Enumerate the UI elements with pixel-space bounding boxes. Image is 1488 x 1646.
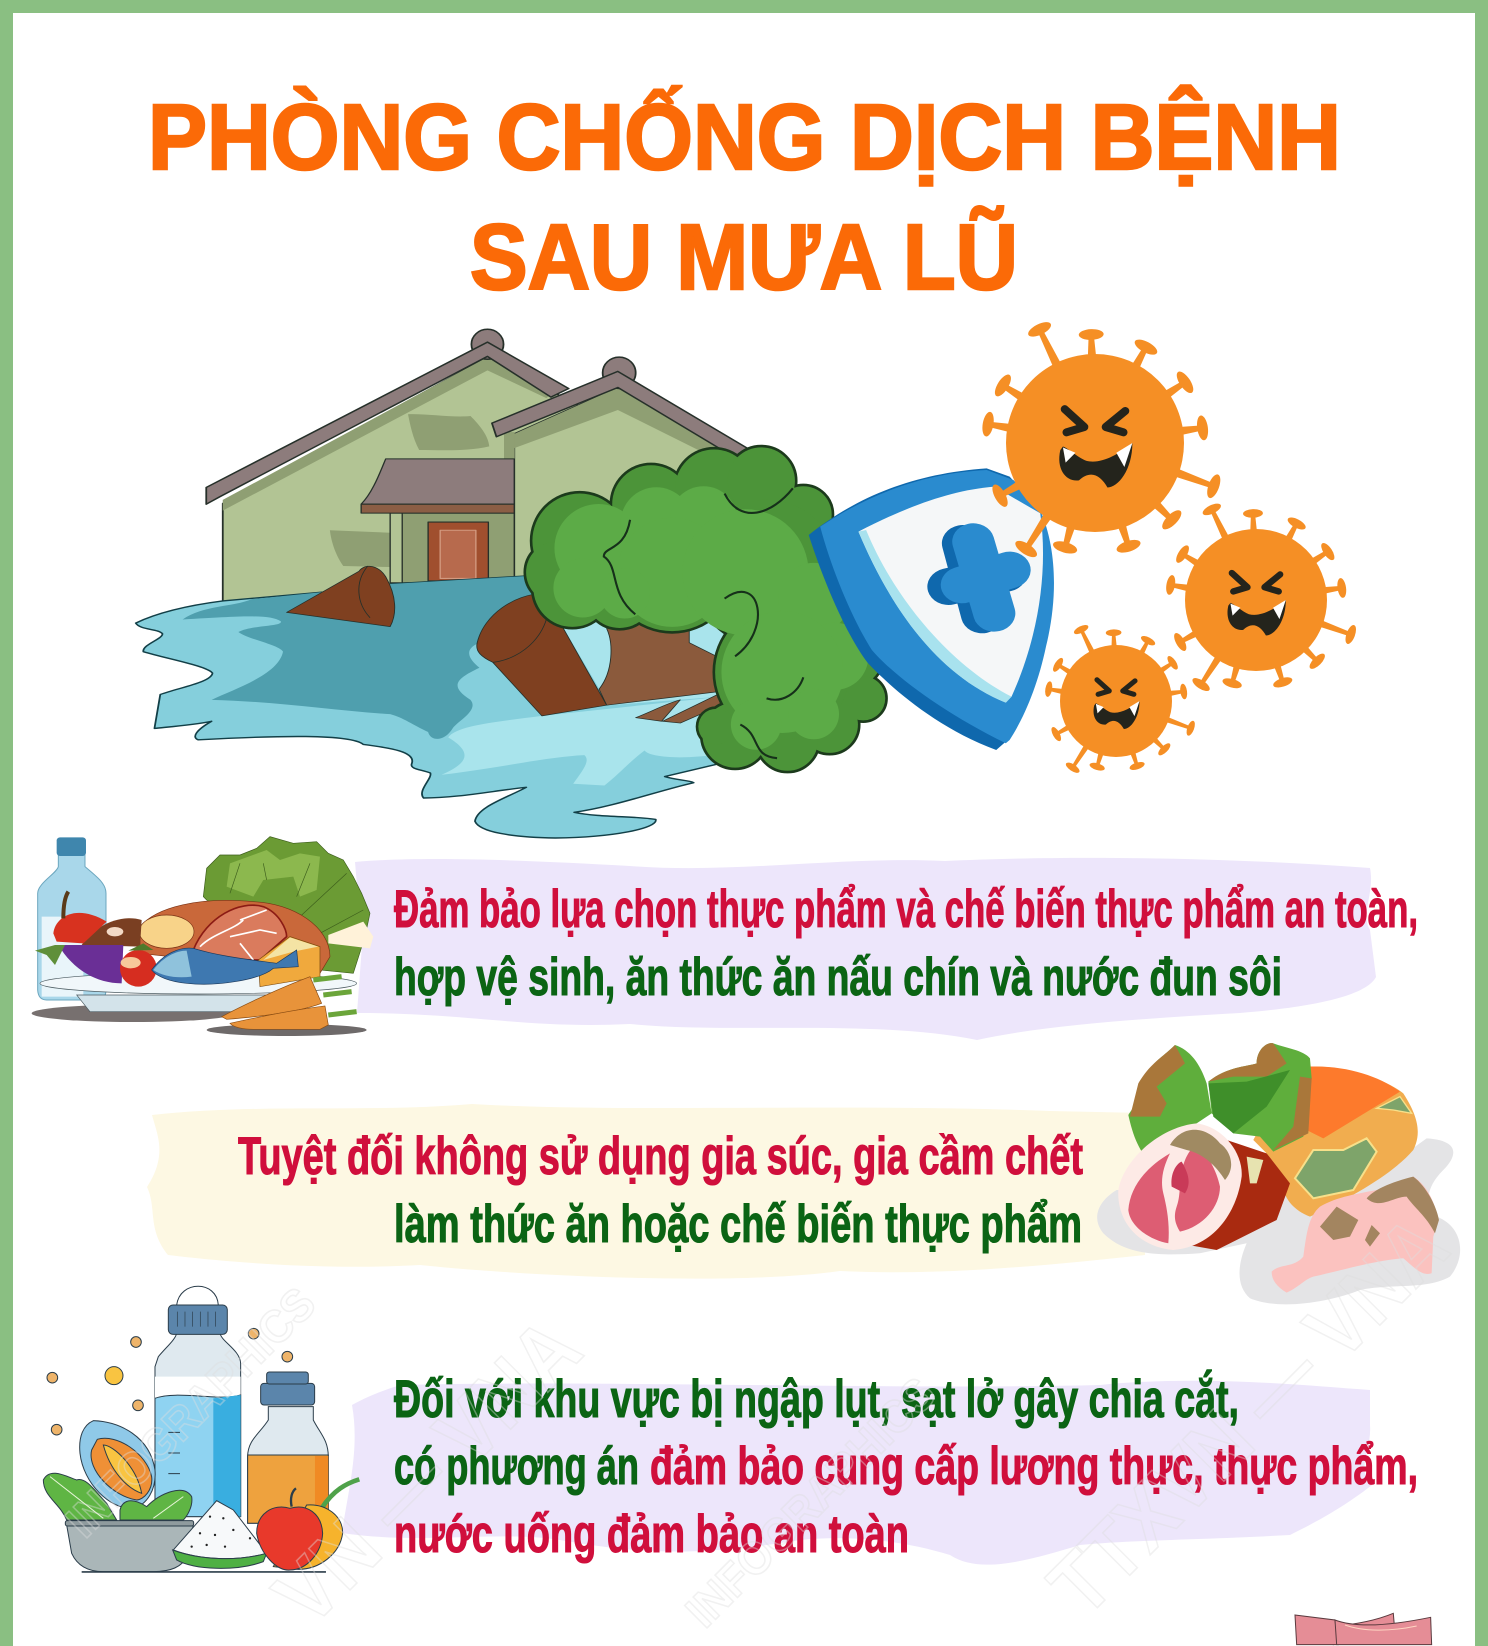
flood water (136, 576, 725, 838)
illustration: safe food plate (32, 837, 373, 1036)
cheese (258, 937, 320, 987)
text block 2: làm thức ăn hoặc chế biến thực phẩm (394, 1195, 1082, 1254)
ham (139, 900, 373, 973)
watermark (55, 1199, 1466, 1643)
tree trunk (599, 614, 725, 705)
text block 2 (238, 1127, 1083, 1254)
text block 2: Tuyệt đối không sử dụng gia súc, gia cầm chết (238, 1127, 1083, 1186)
shield cross (948, 542, 1010, 615)
lettuce (1128, 1043, 1312, 1158)
bell pepper (273, 1479, 359, 1569)
plate (40, 973, 357, 1012)
text block 1 (394, 880, 1418, 1007)
illustration: large virus (981, 319, 1223, 560)
illustration: medium virus (1165, 501, 1358, 694)
illustration: pink sacks at bottom (1295, 1613, 1432, 1645)
illustration: shield (809, 468, 1054, 750)
shield body (809, 468, 1052, 750)
small juice bottle (248, 1372, 328, 1523)
illustration: small virus (1044, 623, 1197, 775)
water bottle (38, 837, 106, 1000)
title (148, 85, 1341, 309)
blob: second text background (147, 1104, 1145, 1279)
title line 1: PHÒNG CHỐNG DỊCH BỆNH (148, 85, 1341, 189)
watermark: VN — VNA (256, 1300, 599, 1643)
text block 3 (394, 1369, 1418, 1564)
large water bottle (155, 1286, 241, 1517)
porch (361, 459, 514, 583)
lettuce (203, 837, 370, 973)
meat (1118, 1123, 1290, 1250)
watermark: INFOGRAPHICS (55, 1277, 325, 1547)
fish (152, 948, 298, 984)
floating logs (287, 566, 607, 716)
bubbles (47, 1328, 293, 1435)
text block 3: có phương án (394, 1437, 639, 1496)
illustration: clean water and food (43, 1286, 359, 1572)
canopy outline (525, 446, 886, 772)
shadow (1097, 1138, 1460, 1304)
illustration: flooded house (136, 329, 747, 838)
canopy light (553, 486, 868, 750)
bowl (65, 1521, 194, 1572)
illustration: spoiled food (1097, 1043, 1460, 1304)
watermark: INFOGRAPHICS (675, 1367, 945, 1637)
chicken leg (1272, 1177, 1439, 1293)
cheese (1253, 1067, 1418, 1217)
plate shadow (32, 1005, 235, 1022)
salad leaves (43, 1473, 192, 1520)
carrots (207, 977, 367, 1036)
blob: third text background (342, 1381, 1372, 1565)
illustration: tree canopy (525, 446, 886, 772)
title line 2: SAU MƯA LŨ (470, 205, 1018, 309)
canopy dark (526, 447, 885, 771)
house walls (206, 329, 747, 603)
text block 3: nước uống đảm bảo an toàn (394, 1505, 909, 1564)
strainer with fruit (67, 1398, 155, 1508)
apple (257, 1488, 323, 1570)
blob: first text background (355, 858, 1376, 1040)
vegetables (35, 892, 157, 987)
salt pile (173, 1501, 267, 1568)
ground line (82, 1569, 326, 1574)
